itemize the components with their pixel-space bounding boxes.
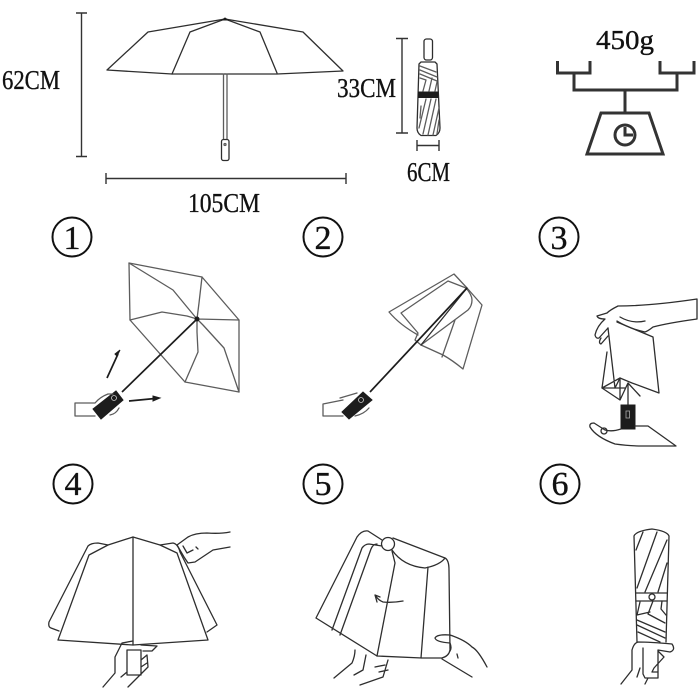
panel: weight — [558, 25, 694, 154]
step number 4: 4 — [64, 466, 82, 503]
step number 4 — [54, 464, 92, 504]
icon: folded umbrella — [417, 39, 440, 136]
panel: step 6 — [540, 464, 674, 684]
width dimension line — [106, 173, 346, 184]
label: 105CM: 105CM — [188, 188, 260, 218]
label: 6CM: 6CM — [407, 157, 450, 187]
step number 5 — [304, 464, 342, 504]
panel: step 3 — [540, 218, 697, 446]
illustration: folding umbrella panels — [49, 532, 230, 687]
illustration: rolling up panels — [316, 531, 487, 685]
step number 5: 5 — [314, 466, 332, 503]
step number 6 — [540, 464, 580, 504]
illustration: open umbrella in hand — [75, 263, 239, 419]
step number 2 — [304, 218, 342, 257]
step number 3: 3 — [550, 220, 568, 257]
step number 1 — [52, 218, 92, 257]
icon: scale — [558, 61, 694, 154]
step number 1: 1 — [64, 220, 80, 257]
step number 2: 2 — [314, 220, 332, 257]
width dimension line — [417, 140, 439, 151]
panel: step 1 — [52, 218, 239, 419]
label: 33CM: 33CM — [337, 73, 396, 103]
icon: open umbrella — [107, 18, 343, 160]
panel: folded umbrella dimensions — [337, 38, 450, 187]
height dimension line — [76, 13, 87, 156]
illustration: collapsing umbrella in hand — [323, 274, 482, 419]
panel: step 5 — [304, 464, 487, 685]
label: 450g: 450g — [596, 25, 654, 55]
illustration: closed umbrella with strap — [621, 529, 674, 684]
panel: open umbrella dimensions — [2, 13, 346, 218]
step number 6: 6 — [552, 466, 568, 503]
panel: step 2 — [304, 218, 482, 419]
height dimension line — [396, 38, 408, 133]
panel: step 4 — [49, 464, 230, 687]
label: 62CM: 62CM — [2, 65, 60, 95]
illustration: pressing umbrella closed between hands — [590, 299, 697, 446]
step number 3 — [540, 218, 578, 257]
